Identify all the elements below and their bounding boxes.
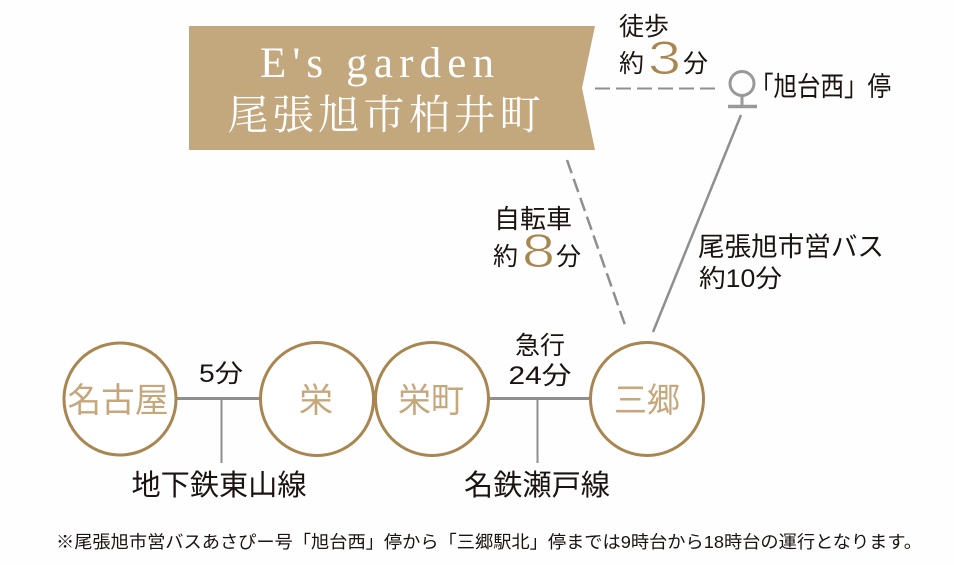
bus time label: 尾張旭市営バス — [698, 232, 884, 262]
bicycle time label: 分 — [556, 243, 581, 271]
station: Sakae: 栄 — [299, 382, 333, 420]
station: Sakaemachi — [376, 342, 488, 456]
station: Sango: 三郷 — [614, 382, 680, 420]
banner: E's garden — [189, 26, 595, 150]
time label: express 24 minutes — [508, 332, 572, 390]
bicycle time label: 約 — [493, 243, 518, 271]
walking time label: 分 — [683, 50, 708, 78]
bicycle time label: 8 — [522, 224, 555, 277]
walking time label: 徒歩 — [619, 13, 669, 41]
bicycle time label: 自転車 — [494, 204, 572, 234]
dashed walking route — [595, 88, 716, 90]
banner: E's garden: E's garden — [260, 40, 494, 87]
line: Sakaemachi to Sango — [489, 398, 591, 463]
station: Nagoya: 名古屋 — [68, 382, 168, 420]
solid bus route — [653, 115, 741, 332]
station: Nagoya — [64, 343, 176, 455]
line name: Higashiyama: 地下鉄東山線 — [132, 469, 306, 502]
footnote: ※尾張旭市営バスあさぴー号「旭台西」停から「三郷駅北」停までは9時台から18時台の運行となります。 — [56, 532, 922, 552]
time label: express 24 minutes: 24分 — [508, 362, 572, 390]
walking time label: 約 — [619, 50, 644, 78]
bus time label — [698, 232, 884, 293]
icon: bus stop pin — [728, 72, 757, 106]
dashed bicycle route — [567, 160, 625, 325]
time label: express 24 minutes: 急行 — [515, 332, 565, 360]
line: Nagoya to Sakae — [176, 398, 261, 463]
line name: Meitetsu Seto: 名鉄瀬戸線 — [464, 469, 610, 502]
walking time label — [619, 13, 708, 84]
walking time label: 3 — [648, 31, 681, 84]
station: Sakae — [260, 342, 374, 456]
station: Sango — [590, 342, 704, 456]
bus time label: 約10分 — [699, 265, 782, 293]
bicycle time label — [493, 204, 581, 277]
time label: 5 minutes: 5分 — [199, 360, 243, 388]
station: Sakaemachi: 栄町 — [398, 382, 464, 420]
bus stop name: 「旭台西」停 — [750, 72, 891, 102]
banner: E's garden: 尾張旭市柏井町 — [228, 92, 540, 138]
